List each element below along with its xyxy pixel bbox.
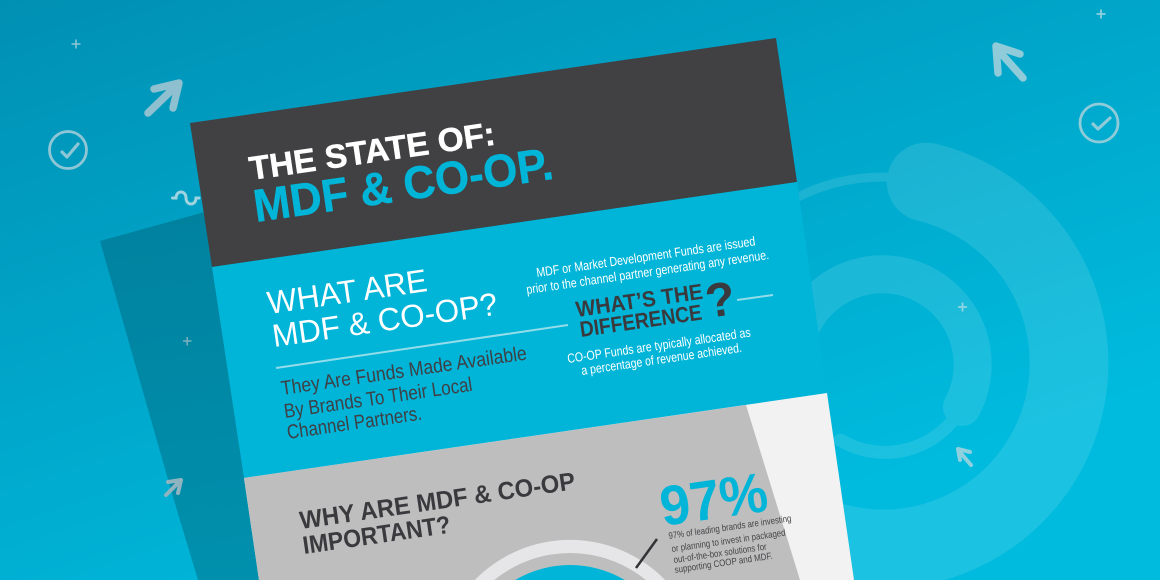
divider line right	[737, 295, 773, 300]
heading: what's the difference	[574, 272, 739, 342]
callout leader line	[636, 539, 657, 568]
icon: plus top left	[72, 40, 80, 48]
CO-OP description: CO-OP Funds are typically allocated as	[566, 325, 752, 366]
heading: what are: WHAT ARE	[265, 262, 429, 321]
icon: squiggle	[172, 192, 199, 204]
definition text: They Are Funds Made Available	[280, 343, 528, 400]
divider line left	[276, 325, 568, 368]
statistic description: 97% of leading brands are investing	[668, 513, 792, 542]
icon: small arrow bottom left	[166, 480, 181, 495]
panel: why important	[244, 393, 854, 580]
heading: why are MDF and CO-OP important: IMPORTANT?	[301, 511, 452, 560]
statistic description: out-of-the-box solutions for	[673, 542, 767, 566]
icon: plus on rings	[958, 302, 967, 312]
shadow sheet behind page	[100, 210, 262, 580]
icon: plus top right	[1096, 10, 1106, 18]
title line one: THE STATE OF:	[247, 115, 497, 187]
icon: arrow top left	[148, 83, 179, 113]
icon: small arrow on rings	[958, 449, 971, 465]
panel: what are MDF and CO-OP	[212, 182, 827, 478]
definition text: Channel Partners.	[286, 403, 423, 444]
CO-OP description	[566, 325, 752, 378]
statistic description: or planning to invest in packaged	[671, 528, 786, 555]
heading: what's the difference: DIFFERENCE	[578, 300, 703, 342]
definition text: By Brands To Their Local	[283, 374, 474, 423]
heading: why are MDF and CO-OP important	[298, 467, 577, 560]
MDF description: MDF or Market Development Funds are issued	[535, 233, 756, 280]
heading: what's the difference: ?	[702, 272, 739, 329]
title line two: MDF & CO-OP.	[250, 137, 556, 232]
donut chart	[475, 540, 665, 580]
icon: plus on shadow sheet	[183, 337, 192, 346]
infographic page	[190, 38, 854, 580]
statistic: 97 percent: 97%	[656, 460, 772, 538]
icon: check circle left	[50, 132, 86, 168]
icon: arrow top right	[996, 46, 1023, 78]
CO-OP description: a percentage of revenue achieved.	[580, 340, 743, 378]
panel: header	[190, 38, 797, 267]
icon: check circle right	[1080, 104, 1118, 142]
statistic description	[668, 513, 792, 576]
MDF description: prior to the channel partner generating any revenue.	[525, 247, 770, 297]
statistic description: supporting COOP and MDF.	[674, 551, 773, 576]
heading: what's the difference: WHAT’S THE	[574, 279, 704, 322]
decorative concentric rings	[798, 143, 1108, 580]
heading: why are MDF and CO-OP important: WHY ARE MDF & CO-OP	[298, 467, 577, 535]
definition text	[280, 343, 528, 444]
heading: MDF and CO-OP: MDF & CO-OP?	[270, 286, 500, 354]
